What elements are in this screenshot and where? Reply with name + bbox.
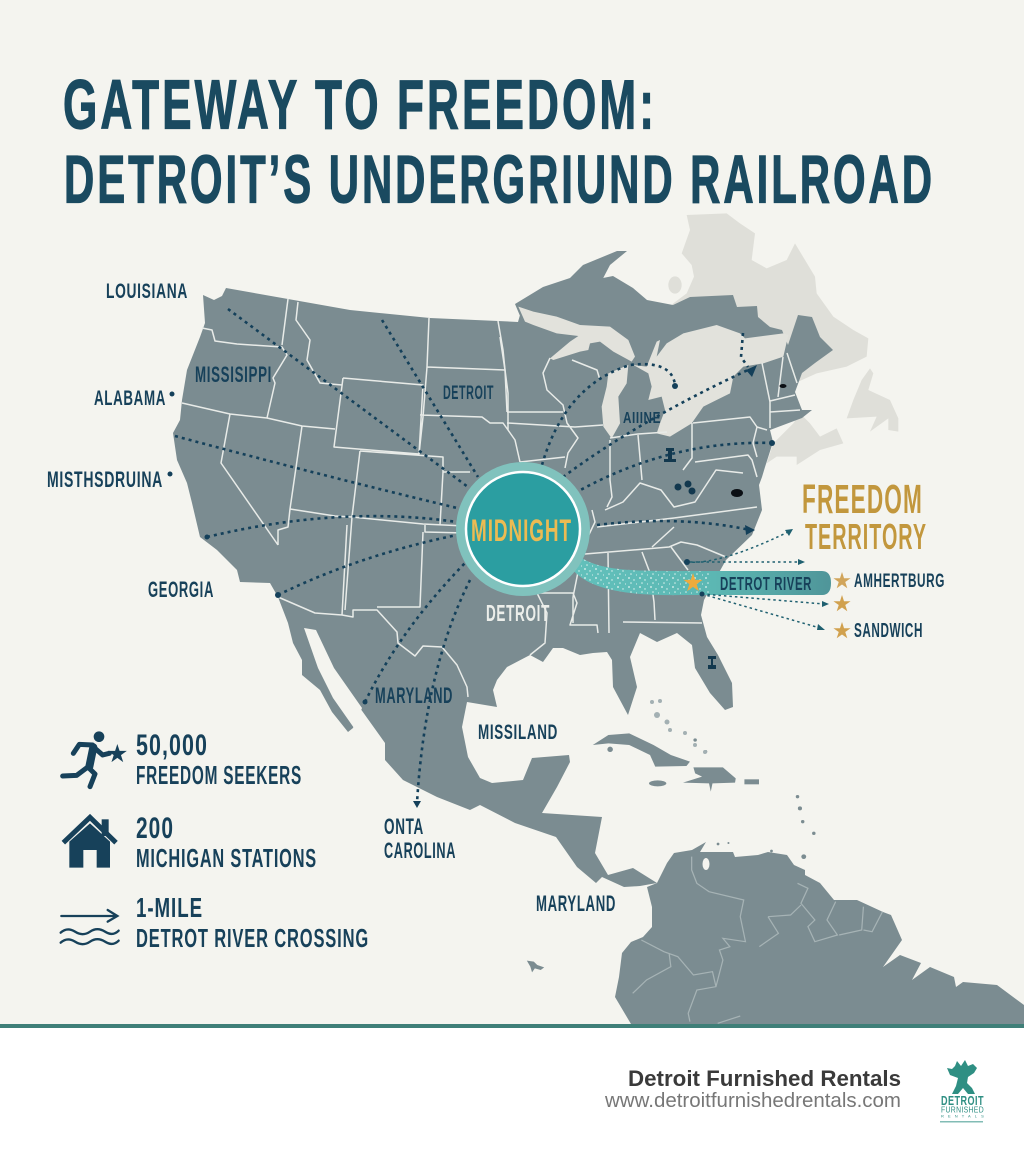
map: Bahamas xyxy=(650,699,707,754)
Detroit River band xyxy=(573,556,831,595)
map: South America xyxy=(615,842,1024,1024)
Canadian towns xyxy=(833,571,945,642)
Midnight circle xyxy=(456,462,590,596)
map labels: MISTHSDRUINA xyxy=(47,467,163,492)
stat: 50,000 freedom seekers: 50,000 xyxy=(136,729,208,762)
logo: DETROIT xyxy=(941,1093,984,1108)
stat: 200 Michigan stations: MICHIGAN STATIONS xyxy=(136,843,317,873)
stat: 200 Michigan stations xyxy=(63,812,317,873)
map labels xyxy=(47,280,661,916)
map: Canada light area xyxy=(667,213,898,465)
map labels: MARYLAND xyxy=(375,683,453,708)
map labels: MISSISIPPI xyxy=(195,362,272,387)
Freedom Territory heading: TERRITORY xyxy=(805,516,927,557)
map: Gulf of California xyxy=(304,628,362,728)
icon: house xyxy=(63,817,116,868)
logo: FURNISHED xyxy=(941,1106,984,1114)
title: GATEWAY TO FREEDOM: xyxy=(63,66,657,144)
stat: 200 Michigan stations: 200 xyxy=(136,812,174,845)
map: South American borders xyxy=(633,857,883,1023)
logo xyxy=(940,1060,984,1122)
map: Great Lakes and Ontario peninsula xyxy=(518,307,788,438)
Canadian towns: SANDWICH xyxy=(854,620,923,642)
map labels: CAROLINA xyxy=(384,838,456,863)
Freedom Territory heading: FREEDOM xyxy=(802,476,923,522)
map labels: LOUISIANA xyxy=(106,280,188,303)
icon: arrow over waves xyxy=(61,910,119,944)
star on river xyxy=(683,573,703,591)
map: Maracaibo lake xyxy=(702,858,710,870)
website: www.detroitfurnishedrentals.com xyxy=(604,1090,901,1112)
route lines converging on Detroit xyxy=(168,309,775,808)
map labels: MISSILAND xyxy=(478,721,558,744)
map labels: ALABAMA xyxy=(94,387,166,410)
logo: RENTALS xyxy=(941,1114,984,1118)
brand name: Detroit Furnished Rentals xyxy=(628,1066,901,1091)
map: United States, Ontario, Mexico and Central America xyxy=(173,251,833,887)
Midnight circle: MIDNIGHT xyxy=(471,512,572,548)
label: Detroit: DETROIT xyxy=(486,600,550,626)
map: state borders xyxy=(182,299,800,697)
label: Detrot River: DETROT RIVER xyxy=(720,574,812,594)
map labels: GEORGIA xyxy=(148,577,214,602)
footer xyxy=(0,1024,1024,1154)
arrows toward Freedom Territory xyxy=(684,529,829,630)
stat: 1-mile Detroit River crossing: 1-MILE xyxy=(136,892,203,923)
stat: 1-mile Detroit River crossing: DETROT RIVER CROSSING xyxy=(136,923,369,953)
Freedom Territory heading xyxy=(802,476,927,557)
Canadian towns: AMHERTBURG xyxy=(854,571,945,592)
stat: 50,000 freedom seekers xyxy=(63,729,302,790)
stat: 50,000 freedom seekers: FREEDOM SEEKERS xyxy=(136,760,302,790)
map: dark city markers xyxy=(664,384,786,669)
stat: 1-mile Detroit River crossing xyxy=(61,892,369,953)
map labels: DETROIT xyxy=(443,383,494,404)
map: North, Central and South America xyxy=(173,213,1024,1024)
icon: running figure with star xyxy=(63,731,127,787)
map: Caribbean islands xyxy=(527,733,816,972)
map labels: ONTA xyxy=(384,814,424,839)
map labels: AIIINE xyxy=(623,410,661,427)
map labels: MARYLAND xyxy=(536,891,616,916)
title xyxy=(63,66,935,218)
